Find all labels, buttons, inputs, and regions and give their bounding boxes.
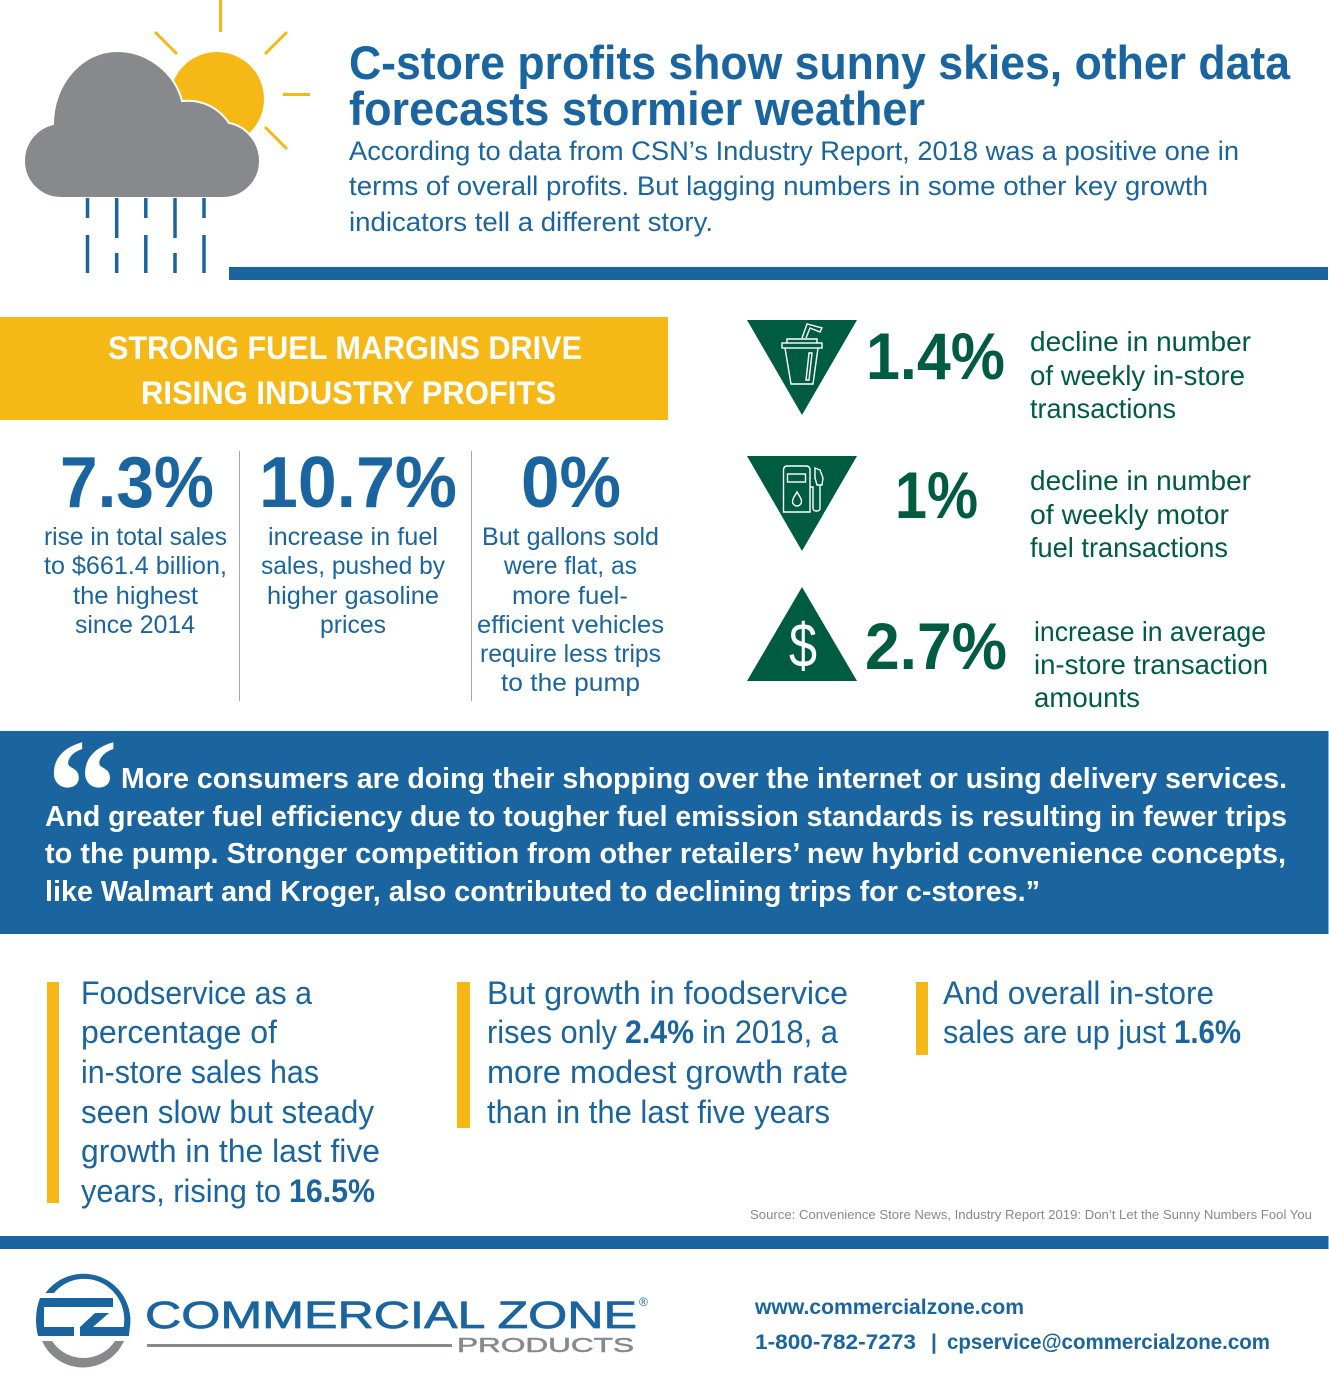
banner: strong fuel margins <box>0 317 668 420</box>
stat: 0% gallons flat: But gallons sold <box>482 523 659 551</box>
icon: down triangle with fuel pump <box>747 456 857 551</box>
stat: 0% gallons flat: efficient vehicles <box>477 611 664 639</box>
stat: 7.3% rise in total sales: rise in total sales <box>44 523 227 551</box>
text: motor fuel transactions decline <box>1030 465 1251 563</box>
callout: in-store sales: And overall in-store <box>943 975 1214 1011</box>
callout: foodservice share: Foodservice as a <box>81 975 312 1011</box>
icon: sun <box>155 0 310 149</box>
callout: foodservice growth <box>457 975 848 1130</box>
callout: foodservice share: 16.5% <box>289 1173 375 1209</box>
stat: 0% gallons flat: 0% <box>521 443 621 523</box>
stat: 7.3% rise in total sales: to $661.4 billion, <box>44 552 227 580</box>
callout: foodservice growth: than in the last five years <box>487 1094 830 1130</box>
quote text: like Walmart and Kroger, also contributed to declining trips for c-stores.” <box>45 876 1040 908</box>
stat: 10.7% increase in fuel sales: 10.7% <box>259 443 457 523</box>
text: motor fuel transactions decline: fuel transactions <box>1030 532 1228 563</box>
callout: foodservice growth: 2.4% <box>625 1014 694 1050</box>
text: transaction amounts increase <box>1034 616 1268 713</box>
stat: 7.3% rise in total sales: the highest <box>73 582 198 610</box>
title: forecasts stormier weather <box>349 82 925 135</box>
contact details <box>754 1296 1270 1354</box>
header rule <box>229 267 1328 280</box>
stat: 10.7% increase in fuel sales: increase in fuel <box>268 523 438 551</box>
stat: 0% gallons flat: to the pump <box>501 669 640 697</box>
stat: 10.7% increase in fuel sales: prices <box>320 611 386 639</box>
intro text: According to data from CSN’s Industry Report, 2018 was a positive one in <box>349 136 1239 166</box>
stat: 7.3% rise in total sales: since 2014 <box>75 611 195 639</box>
title <box>349 36 1291 135</box>
callout: foodservice share: in-store sales has <box>81 1054 319 1090</box>
stat: 0% gallons flat: were flat, as <box>503 552 637 580</box>
logo wordmark <box>145 1295 648 1357</box>
text: motor fuel transactions decline: decline in number <box>1030 465 1251 496</box>
intro text: terms of overall profits. But lagging numbers in some other key growth <box>349 171 1208 201</box>
contact details: www.commercialzone.com <box>754 1296 1024 1319</box>
logo mark <box>36 1274 130 1367</box>
quote text: More consumers are doing their shopping over the internet or using delivery services. <box>121 763 1287 795</box>
text: in-store transactions decline: of weekly in-store <box>1030 360 1245 391</box>
source note: Source: Convenience Store News, Industry Report 2019: Don’t Let the Sunny Numbers Fool You <box>750 1208 1312 1222</box>
stat: 10.7% increase in fuel sales: sales, pushed by <box>261 552 445 580</box>
stat: 1.4%: 1.4% <box>866 319 1005 393</box>
quote text <box>45 763 1287 908</box>
icon: rain <box>88 198 204 273</box>
callout: foodservice share: percentage of <box>81 1014 277 1050</box>
contact details: | <box>931 1331 937 1354</box>
text: motor fuel transactions decline: of weekly motor <box>1030 499 1229 530</box>
icon: up triangle with dollar sign: $ <box>789 612 817 681</box>
stat: 0% gallons flat: require less trips <box>480 640 661 668</box>
text: in-store transactions decline: decline in number <box>1030 326 1251 357</box>
icon: sun behind rain cloud <box>24 0 310 273</box>
banner: strong fuel margins: STRONG FUEL MARGINS DRIVE <box>108 330 582 366</box>
stat: 0% gallons flat <box>477 443 664 697</box>
text: transaction amounts increase: amounts <box>1034 682 1140 713</box>
callout: foodservice growth: in 2018, a <box>702 1014 838 1050</box>
logo wordmark: COMMERCIAL ZONE <box>145 1295 637 1337</box>
icon: down triangle with drink cup <box>747 320 857 415</box>
callout: foodservice growth: more modest growth rate <box>487 1054 848 1090</box>
text: in-store transactions decline: transactions <box>1030 393 1176 424</box>
title: C-store profits show sunny skies, other data <box>349 36 1291 89</box>
text: transaction amounts increase: increase in average <box>1034 616 1266 647</box>
callout: foodservice share <box>47 975 380 1209</box>
stat: 1%: 1% <box>895 458 978 532</box>
logo wordmark: PRODUCTS <box>457 1335 634 1357</box>
banner: strong fuel margins: RISING INDUSTRY PROFITS <box>141 375 556 411</box>
stat: 7.3% rise in total sales <box>44 443 227 639</box>
stat: 10.7% increase in fuel sales: higher gasoline <box>267 582 439 610</box>
callout: in-store sales <box>916 975 1241 1055</box>
intro text <box>349 136 1239 237</box>
quote text: And greater fuel efficiency due to tougher fuel emission standards is resulting in fewer trips <box>45 801 1287 833</box>
text: transaction amounts increase: in-store transaction <box>1034 649 1268 680</box>
icon: quotation mark: “ <box>47 709 118 875</box>
icon: up triangle with dollar sign <box>747 587 857 681</box>
quote text: to the pump. Stronger competition from other retailers’ new hybrid convenience concepts, <box>45 838 1286 870</box>
callout: foodservice share: seen slow but steady <box>81 1094 374 1130</box>
stat: 7.3% rise in total sales: 7.3% <box>60 443 214 523</box>
panel: quote band <box>0 709 1328 934</box>
icon: cloud <box>24 51 260 198</box>
stat: 0% gallons flat: more fuel- <box>512 582 628 610</box>
footer rule <box>0 1236 1328 1249</box>
contact details: 1-800-782-7273 <box>755 1331 916 1354</box>
logo wordmark: ® <box>639 1295 648 1309</box>
callout: foodservice share: growth in the last five <box>81 1133 380 1169</box>
callout: foodservice growth: But growth in foodservice <box>487 975 848 1011</box>
contact details: cpservice@commercialzone.com <box>947 1331 1270 1354</box>
stat: 10.7% increase in fuel sales <box>259 443 457 639</box>
callout: foodservice growth: rises only <box>487 1014 617 1050</box>
callout: in-store sales: 1.6% <box>1174 1014 1241 1050</box>
callout: in-store sales: sales are up just <box>943 1014 1166 1050</box>
stat: 2.7%: 2.7% <box>865 609 1007 683</box>
text: in-store transactions decline <box>1030 326 1251 424</box>
intro text: indicators tell a different story. <box>349 207 713 237</box>
callout: foodservice share: years, rising to <box>81 1173 281 1209</box>
logo: Commercial Zone Products <box>36 1274 648 1367</box>
